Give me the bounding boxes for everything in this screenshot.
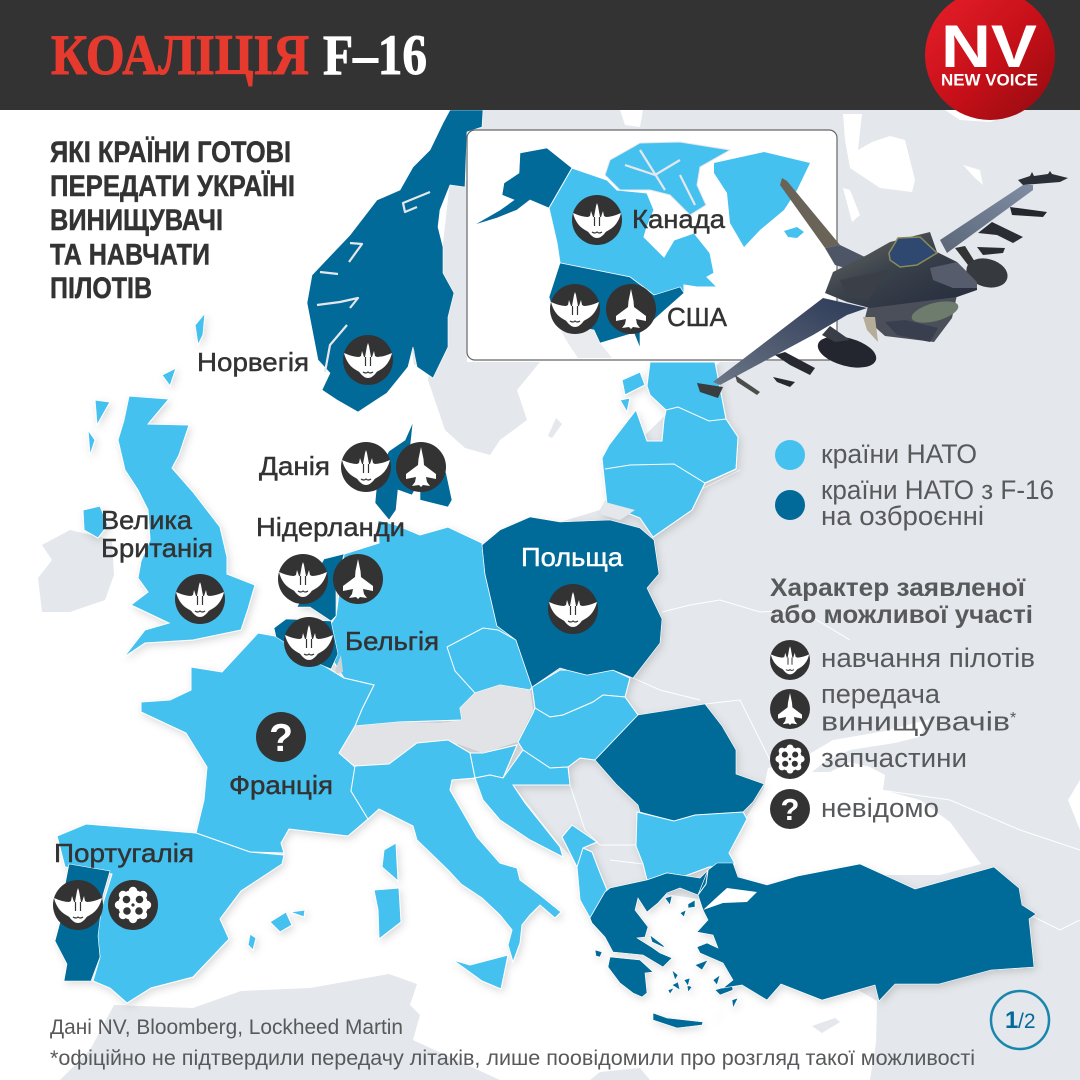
left wing xyxy=(713,298,867,385)
panel: inset North America xyxy=(467,130,837,360)
subtitle: ТА НАВЧАТИ xyxy=(50,238,210,272)
country: Slovenia xyxy=(470,745,517,778)
country: Austria and Switzerland xyxy=(337,685,533,766)
country: Greece xyxy=(590,870,738,1028)
seas over the grey land xyxy=(620,110,1080,890)
fuselage shadow panel xyxy=(840,270,888,300)
page number: /2 xyxy=(1018,1010,1036,1033)
legend item: fighter transfer: передача xyxy=(821,679,941,709)
source note xyxy=(50,1016,975,1070)
legend item: fighter transfer: * xyxy=(1010,710,1016,727)
label: Norway xyxy=(197,335,393,385)
legend item: pilot training: навчання пілотів xyxy=(821,643,1035,673)
label: France xyxy=(229,712,333,800)
legend item: unknown: невідомо xyxy=(821,793,939,823)
wingtip missile, right xyxy=(1018,171,1068,185)
country: Hungary xyxy=(518,695,638,768)
right wing xyxy=(940,185,1033,253)
central Europe: Germany and Czechia xyxy=(320,520,532,726)
legend: participation xyxy=(770,574,1035,829)
countries: Netherlands and Belgium xyxy=(274,554,344,669)
label: Great Britain: Британія xyxy=(101,533,213,563)
label: USA xyxy=(550,284,728,334)
belly pod xyxy=(885,320,938,342)
label: Belgium xyxy=(284,617,439,667)
source note: Дані NV, Bloomberg, Lockheed Martin xyxy=(50,1016,403,1039)
source note: *офіційно не підтвердили передачу літаків, лише поовідомили про розгляд такої можливості xyxy=(50,1047,975,1070)
Arctic islands xyxy=(605,142,730,215)
country: Luxembourg xyxy=(335,655,343,674)
title: F–16 xyxy=(323,24,427,87)
tail fin xyxy=(780,178,840,248)
islands: Sicily, Sardinia, Corsica, Balearics xyxy=(248,843,508,989)
fuselage xyxy=(825,232,977,308)
Kaliningrad xyxy=(600,502,635,520)
legend item: unknown xyxy=(770,789,939,829)
right drop tank xyxy=(963,254,1011,292)
label: USA: США xyxy=(667,302,728,332)
label: Belgium: Бельгія xyxy=(345,626,439,656)
label: Portugal: Португалія xyxy=(54,838,194,868)
left drop tank xyxy=(814,331,880,373)
label: Denmark: Данія xyxy=(259,451,330,481)
member countries group xyxy=(55,313,1036,1028)
label: Canada xyxy=(572,195,726,245)
canopy xyxy=(889,237,937,267)
logo: NV New Voice: NV xyxy=(941,13,1037,80)
label: France: ? xyxy=(269,717,293,760)
legend: map colours xyxy=(775,439,1054,531)
legend item: pilot training xyxy=(770,640,1035,680)
nose xyxy=(930,262,977,288)
underwing stores, left xyxy=(773,352,815,387)
legend: map colours: країни НАТО xyxy=(821,439,977,469)
title: КОАЛІЦІЯ xyxy=(51,24,309,87)
right pylon xyxy=(955,246,975,265)
subtitle: ПЕРЕДАТИ УКРАЇНІ xyxy=(50,170,295,203)
page number xyxy=(991,991,1049,1049)
Norway fjords xyxy=(317,192,430,372)
legend item: unknown: ? xyxy=(781,792,799,827)
label: Portugal xyxy=(53,838,194,930)
label: Netherlands: Нідерланди xyxy=(256,512,405,542)
country: Bulgaria xyxy=(636,812,747,880)
label: Great Britain xyxy=(101,505,225,624)
ventral fin xyxy=(863,317,878,342)
subtitle: ПІЛОТІВ xyxy=(50,272,152,305)
country: Slovakia xyxy=(532,670,630,717)
title xyxy=(0,0,1080,110)
Mexico xyxy=(557,323,612,358)
subtitle xyxy=(50,136,295,305)
Iceland xyxy=(784,227,804,238)
legend: map colours: на озброєнні xyxy=(821,501,984,531)
subtitle: ЯКІ КРАЇНИ ГОТОВІ xyxy=(50,136,291,169)
legend item: spare parts xyxy=(770,739,967,779)
country: Croatia xyxy=(475,750,570,857)
label: Netherlands xyxy=(256,512,405,604)
country: France xyxy=(141,633,374,853)
underwing stores, right xyxy=(1010,207,1047,217)
countries: Baltic states xyxy=(602,362,738,537)
label: France: Франція xyxy=(229,770,333,800)
legend item: fighter transfer: винищувачів xyxy=(821,706,1010,736)
label: Great Britain: Велика xyxy=(101,505,193,535)
legend: map colours: країни НАТО з F-16 xyxy=(821,475,1054,505)
page number: 1 xyxy=(1005,1007,1018,1034)
legend item: fighter transfer xyxy=(770,679,1016,736)
country: Turkey xyxy=(697,863,1036,1001)
country: Poland xyxy=(482,517,662,687)
label: Norway: Норвегія xyxy=(197,347,309,377)
Greenland xyxy=(714,152,810,247)
legend item: spare parts: запчастини xyxy=(821,743,967,773)
Sea of Marmara xyxy=(703,888,757,910)
label: Denmark xyxy=(259,442,446,492)
logo: NV New Voice: NEW VOICE xyxy=(941,70,1038,90)
label: Poland: Польща xyxy=(521,542,624,572)
label: Poland xyxy=(521,542,624,634)
Germany-Czechia border xyxy=(447,628,516,693)
Northern Ireland and islands xyxy=(83,313,205,538)
country: Romania xyxy=(595,704,764,821)
underbody xyxy=(865,295,957,342)
country: Denmark xyxy=(375,422,452,520)
country: Italy xyxy=(351,740,561,962)
countries: Montenegro and Albania xyxy=(562,825,607,918)
USA xyxy=(549,263,684,348)
green intake xyxy=(909,297,961,327)
subtitle: ВИНИЩУВАЧІ xyxy=(50,204,223,237)
country: Spain xyxy=(57,824,284,1003)
legend: participation: або можливої участі xyxy=(770,601,1033,629)
border lines on grey land xyxy=(570,470,1080,930)
Alaska xyxy=(474,148,572,225)
country: Great Britain xyxy=(118,396,255,657)
country: Portugal xyxy=(55,864,110,981)
logo: NV New Voice xyxy=(925,0,1055,120)
label: Canada: Канада xyxy=(632,204,726,234)
Canada xyxy=(549,168,717,295)
legend: participation: Характер заявленої xyxy=(770,574,1026,602)
country: Norway xyxy=(307,110,483,412)
illustration: F-16 jet xyxy=(697,171,1068,398)
